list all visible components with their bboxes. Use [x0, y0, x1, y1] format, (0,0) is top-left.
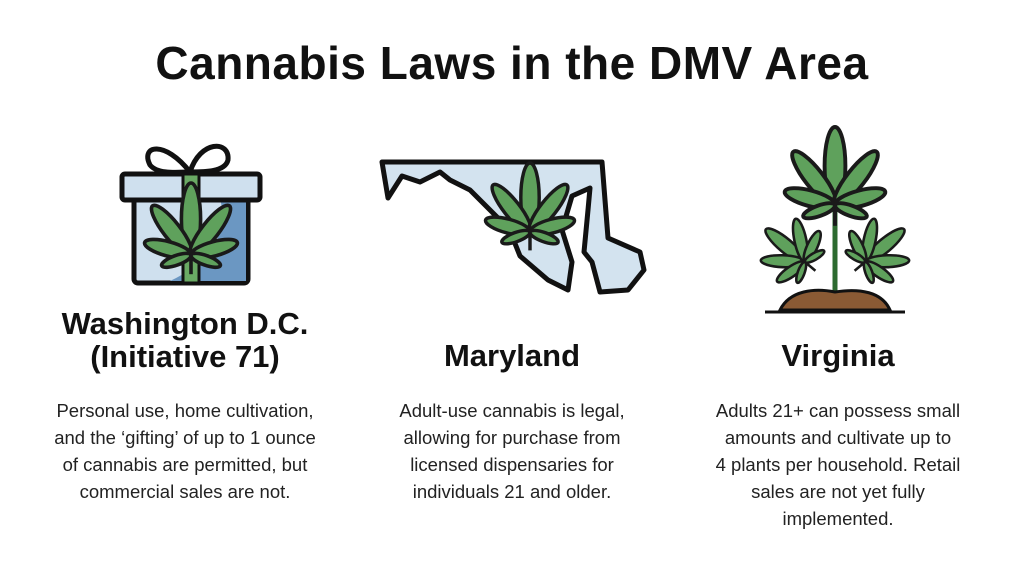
heading: Washington DC: (Initiative 71): [90, 339, 280, 374]
text: Virginia: Adults 21+ can possess small: [716, 400, 960, 421]
text: Virginia: amounts and cultivate up to: [725, 427, 951, 448]
text: DC: [54, 400, 316, 502]
text: DC: and the ‘gifting’ of up to 1 ounce: [54, 427, 316, 448]
text: DC: commercial sales are not.: [80, 481, 290, 502]
heading: Washington DC: Washington D.C.: [62, 306, 308, 341]
text: Maryland: individuals 21 and older.: [413, 481, 611, 502]
text: Maryland: licensed dispensaries for: [410, 454, 614, 475]
text: Virginia: sales are not yet fully: [751, 481, 925, 502]
text: Maryland: allowing for purchase from: [404, 427, 620, 448]
heading: Virginia: Virginia: [781, 338, 895, 373]
icon: gift box with cannabis leaf: [122, 146, 260, 283]
icon: Maryland map: [382, 162, 644, 292]
heading: Maryland: Maryland: [444, 338, 580, 373]
text: Virginia: 4 plants per household. Retail: [716, 454, 960, 475]
text: DC: of cannabis are permitted, but: [63, 454, 307, 475]
text: Maryland: Adult-use cannabis is legal,: [399, 400, 625, 421]
text: Virginia: [716, 400, 960, 529]
heading: Washington DC: [62, 306, 308, 374]
icon: cannabis plant in soil: [744, 127, 926, 312]
text: DC: Personal use, home cultivation,: [56, 400, 314, 421]
title: Cannabis Laws in the DMV Area: [155, 37, 869, 89]
text: Virginia: implemented.: [782, 508, 894, 529]
text: Maryland: [399, 400, 625, 502]
